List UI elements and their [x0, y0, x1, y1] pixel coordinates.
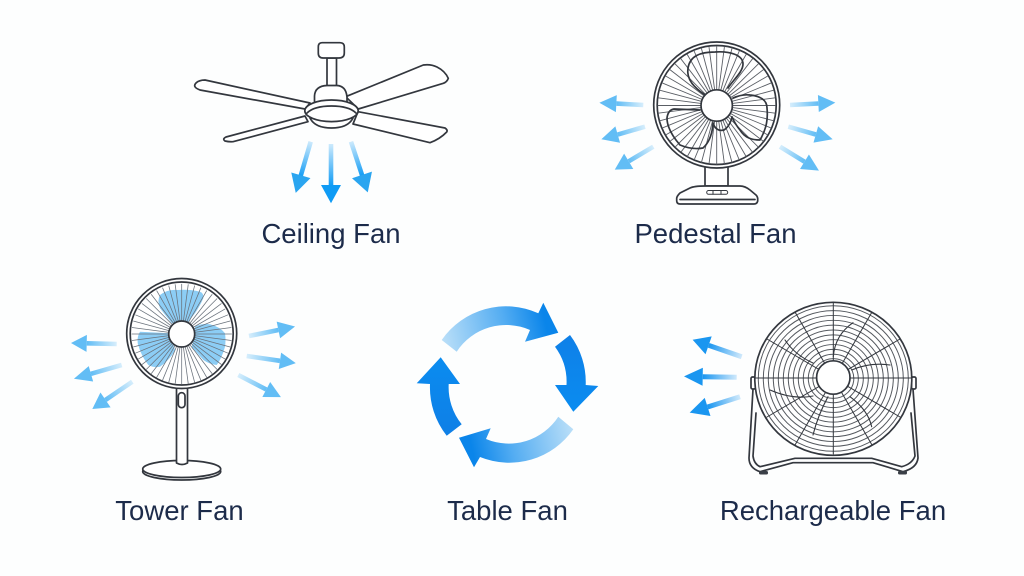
arrow: left arc [417, 357, 462, 436]
arrow: left airflow middle [684, 367, 737, 386]
arrow: right airflow [341, 138, 378, 196]
arrow: right airflow bottom [776, 139, 823, 178]
arrow: right airflow middle [246, 348, 297, 371]
arrow: left airflow bottom [87, 374, 137, 416]
label: Table Fan: Table Fan [447, 495, 568, 526]
label: Pedestal Fan: Pedestal Fan [634, 218, 797, 249]
arrow: left airflow middle [72, 357, 124, 386]
arrow: bottom arc [459, 417, 573, 467]
arrow: left airflow top [71, 334, 117, 352]
arrow: left airflow bottom [687, 388, 743, 422]
label: Tower Fan: Tower Fan [115, 495, 244, 526]
icon: circular arrows [417, 303, 598, 467]
arrow: left airflow top [690, 331, 745, 366]
arrow: left airflow [286, 139, 320, 196]
arrow: left airflow bottom [610, 139, 658, 177]
arrow: centre airflow [321, 144, 341, 203]
label: Rechargeable Fan: Rechargeable Fan [720, 495, 946, 526]
panel: rechargeable fan [684, 302, 946, 526]
label: Ceiling Fan: Ceiling Fan [261, 218, 401, 249]
arrow: right airflow top [790, 94, 836, 113]
arrow: left airflow top [599, 94, 644, 113]
icon: rechargeable fan [749, 302, 918, 474]
icon: tower fan [127, 278, 237, 480]
panel: ceiling fan [195, 43, 448, 249]
arrow: left airflow middle [599, 119, 647, 147]
icon: ceiling fan [195, 43, 448, 143]
panel: pedestal fan [599, 42, 836, 249]
arrow: top arc [442, 303, 558, 352]
arrow: right airflow top [247, 318, 297, 344]
arrow: right airflow bottom [234, 367, 285, 405]
arrow: right arc [555, 335, 598, 412]
arrow: right airflow middle [786, 119, 835, 147]
icon: pedestal fan [654, 42, 780, 204]
panel: tower fan [71, 278, 297, 526]
panel: table fan [417, 303, 598, 526]
